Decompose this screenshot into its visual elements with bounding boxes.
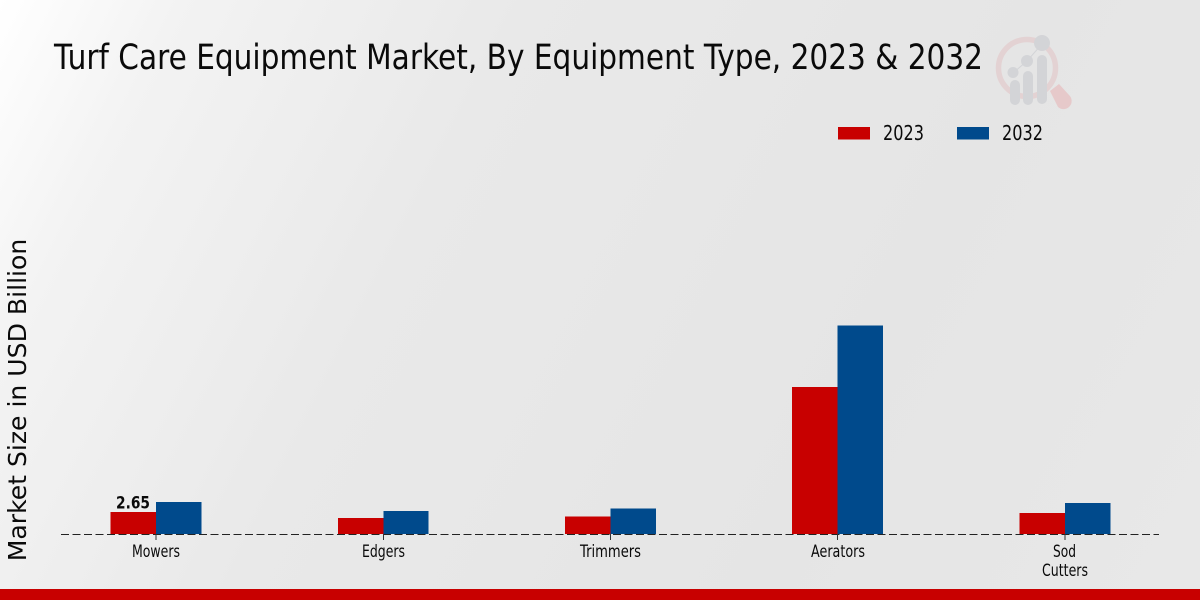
bars: Aerators	[792, 326, 883, 534]
legend item: 2032: 2032	[1002, 121, 1043, 145]
bars: Trimmers	[565, 508, 656, 534]
x axis labels: Aerators	[811, 542, 865, 561]
x axis labels: Mowers	[132, 542, 180, 561]
legend item: 2023	[838, 121, 924, 145]
icon: magnifier logo watermark	[998, 35, 1072, 109]
x axis labels: Cutters	[1042, 561, 1088, 580]
x axis labels: Edgers	[362, 542, 405, 561]
y axis label: Market Size in USD Billion	[3, 239, 32, 561]
x axis baseline	[61, 534, 1159, 536]
bars: Edgers	[338, 511, 428, 534]
legend	[838, 121, 1043, 145]
x axis labels	[132, 542, 1088, 580]
x axis labels: Sod	[1053, 542, 1076, 561]
legend item: 2032	[957, 121, 1043, 145]
footer bar	[0, 589, 1200, 600]
bars: Mowers	[110, 494, 202, 534]
value label: 2.65: 2.65	[116, 494, 150, 512]
title: Turf Care Equipment Market, By Equipment Type, 2023 & 2032	[53, 38, 983, 78]
bar chart	[61, 326, 1159, 580]
x axis labels: Trimmers	[579, 542, 641, 561]
x axis tick marks	[156, 534, 1065, 540]
bars: Sod Cutters	[1020, 503, 1110, 534]
legend item: 2023: 2023	[883, 121, 924, 145]
